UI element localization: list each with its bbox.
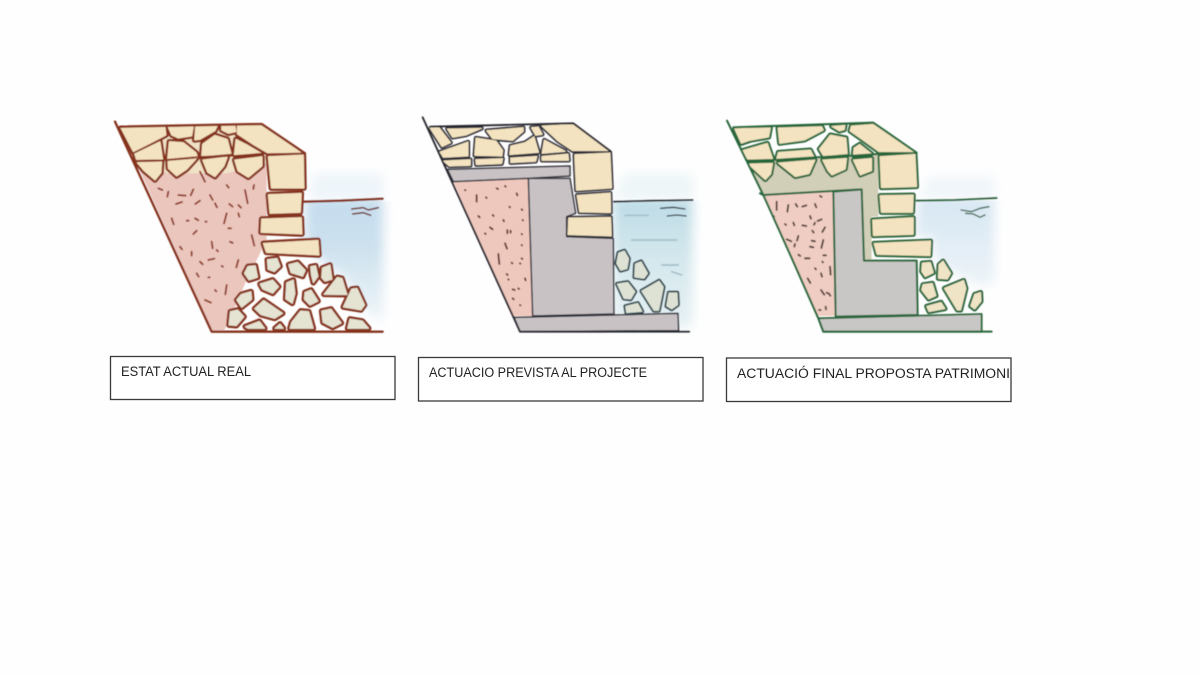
concrete cap	[447, 166, 570, 182]
water ripples	[661, 207, 686, 216]
panel: actuacio prevista al projecte	[423, 117, 693, 332]
mortar speckles	[158, 172, 254, 303]
caption: actuacio final proposta patrimoni	[726, 358, 1011, 402]
course lines	[133, 153, 305, 161]
sky tint	[614, 173, 693, 200]
faint water strokes	[625, 215, 682, 275]
water ripples	[961, 207, 989, 217]
rubble stones	[922, 261, 981, 312]
existing mortar fill	[453, 178, 533, 316]
rubble stones	[229, 258, 369, 328]
water wash	[305, 197, 383, 323]
masonry stones	[430, 124, 612, 236]
water wash	[915, 197, 994, 287]
mortar speckles	[465, 186, 526, 305]
concrete footing	[514, 313, 679, 332]
stone underlay	[120, 124, 267, 173]
infographic canvas	[110, 116, 1012, 402]
concrete wall	[833, 189, 918, 317]
bank outline and waterline	[423, 117, 693, 332]
mortar speckles	[773, 196, 831, 310]
bank outline and waterline	[115, 122, 383, 332]
caption: actuacio prevista al projecte	[418, 358, 703, 401]
caption: estat actual real	[110, 356, 395, 400]
existing mortar fill	[763, 191, 835, 316]
mortar core	[135, 160, 267, 331]
rubble stones	[617, 251, 678, 313]
concrete wall	[528, 178, 614, 316]
caption: actuacio prevista al projecte: ACTUACIO PREVISTA AL PROJECTE	[429, 365, 647, 380]
caption: estat actual real: ESTAT ACTUAL REAL	[121, 364, 251, 379]
caption: actuacio final proposta patrimoni: ACTUACIÓ FINAL PROPOSTA PATRIMONI	[737, 366, 1010, 381]
water ripples	[352, 208, 378, 215]
concrete footing	[818, 314, 982, 332]
masonry stones	[735, 124, 931, 256]
bank outline and waterline	[727, 121, 997, 332]
water wash	[613, 197, 693, 327]
lime mortar cap	[747, 153, 878, 261]
panel: estat actual real	[115, 122, 383, 332]
panel: actuacio final proposta patrimoni	[727, 121, 997, 332]
sky tint	[918, 177, 995, 199]
sky tint	[308, 173, 383, 200]
coping and arch stones	[121, 124, 319, 255]
